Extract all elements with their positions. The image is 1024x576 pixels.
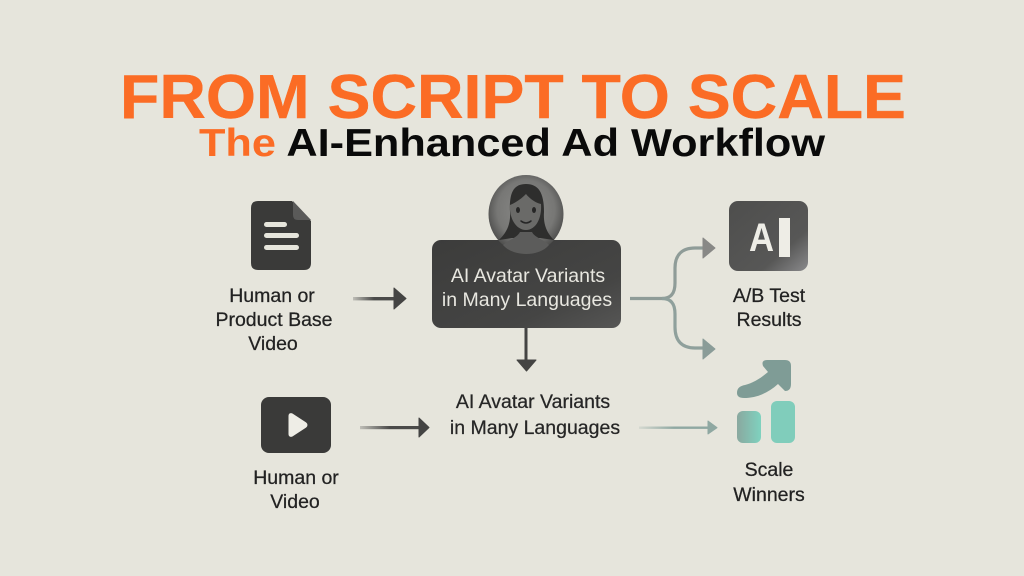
panel: AI avatar variants box: [432, 240, 621, 328]
icon: AI A/B tile: A: [749, 216, 774, 260]
icon: AI A/B tile: [729, 201, 808, 271]
text: AI Avatar Variants in Many Languages: in Many Languages: [450, 417, 620, 439]
label: Human or Video: Human or: [253, 467, 339, 489]
arrow: branching to A/B test and scale: [630, 238, 715, 359]
label: Scale Winners: Scale: [745, 459, 793, 481]
box text: AI Avatar Variants: [451, 265, 605, 287]
short bar: [737, 411, 761, 443]
icon: video play tile: [261, 397, 331, 453]
arrow: avatar box down: [517, 328, 536, 371]
icon: document: [251, 201, 311, 270]
growth arrow: [737, 360, 791, 398]
text: AI Avatar Variants in Many Languages: AI Avatar Variants: [456, 391, 610, 413]
label: Human or Product Base Video: Video: [248, 333, 298, 355]
box text: in Many Languages: [442, 289, 612, 311]
label: Scale Winners: Winners: [733, 484, 805, 506]
title: FROM SCRIPT TO SCALE: [120, 63, 906, 132]
label: Human or Product Base Video: Human or: [229, 285, 315, 307]
label: Human or Video: Video: [270, 491, 320, 513]
arrow: video to variants: [360, 418, 429, 437]
tall bar: [771, 401, 795, 443]
arrow: variants to scale winners: [639, 421, 717, 434]
subtitle: The AI-Enhanced Ad Workflow: [199, 122, 826, 165]
icon: avatar: [488, 175, 564, 254]
label: A/B Test Results: A/B Test: [733, 285, 806, 307]
label: A/B Test Results: Results: [736, 309, 802, 331]
label: Human or Product Base Video: Product Base: [215, 309, 333, 331]
icon: scale winners chart: [737, 360, 795, 443]
arrow: document to avatar box: [353, 288, 406, 309]
